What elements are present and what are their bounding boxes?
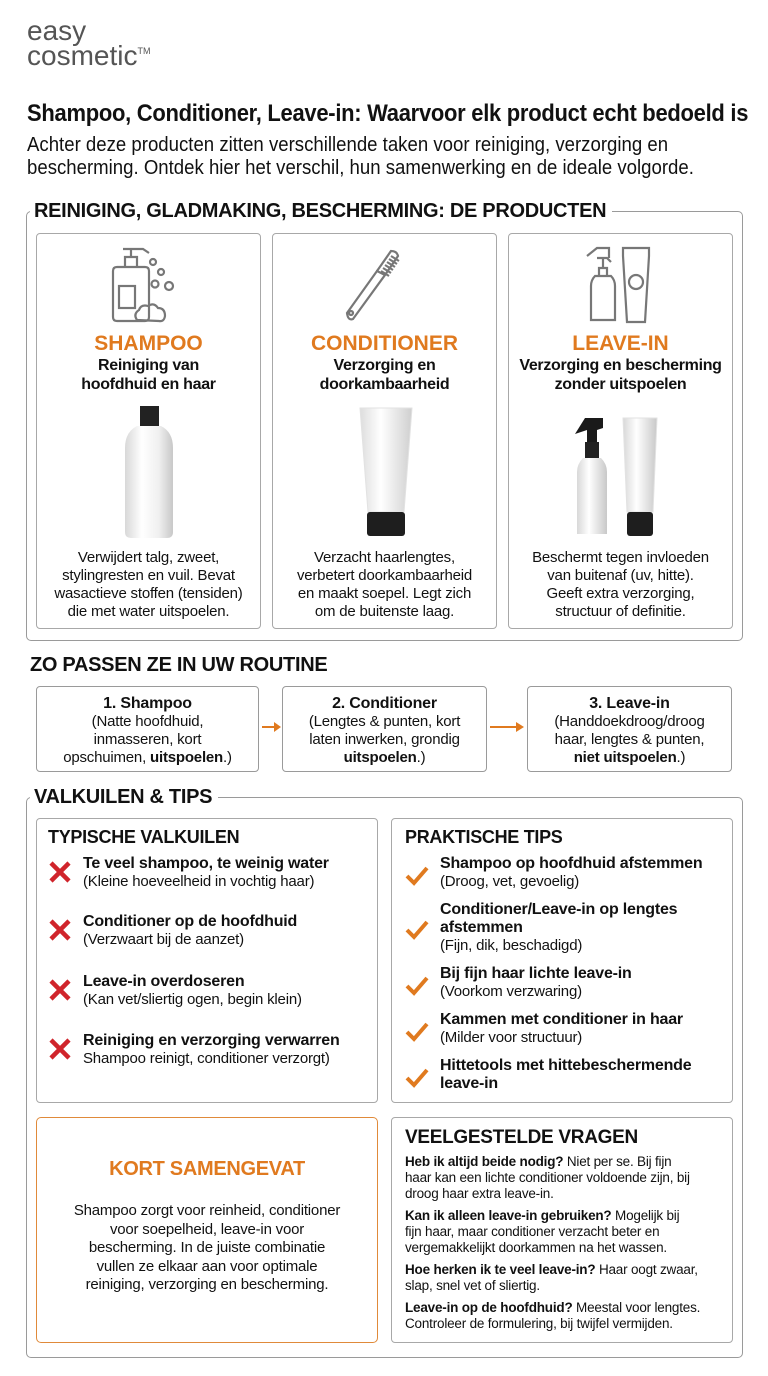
- heading: TYPISCHE VALKUILEN: [48, 827, 239, 847]
- arrow 1: [262, 722, 281, 732]
- description: om de buitenste laag.: [315, 603, 454, 620]
- pitfall 4: [50, 1032, 340, 1067]
- product name: CONDITIONER: [311, 332, 458, 355]
- step 3: [527, 686, 732, 772]
- summary heading: KORT SAMENGEVAT: [109, 1158, 305, 1180]
- FAQ items: Heb ik altijd beide nodig? Niet per se. Bij fijn: [405, 1154, 671, 1169]
- summary text: Shampoo zorgt voor reinheid, conditioner: [74, 1202, 340, 1219]
- tip 5: [406, 1057, 692, 1092]
- description: wasactieve stoffen (tensiden): [54, 585, 243, 602]
- summary text: reiniging, verzorging en bescherming.: [86, 1276, 328, 1293]
- tip 4: [406, 1011, 683, 1046]
- FAQ items: Kan ik alleen leave-in gebruiken? Mogelijk bij: [405, 1208, 679, 1223]
- section heading: routine: ZO PASSEN ZE IN UW ROUTINE: [30, 654, 327, 676]
- description: [297, 549, 472, 620]
- pitfall 1: Te veel shampoo, te weinig water: [83, 855, 329, 872]
- subtitle: hoofdhuid en haar: [81, 376, 216, 393]
- pitfall 2: [50, 913, 297, 948]
- logo: easy: [27, 15, 86, 46]
- image: tube: [360, 408, 412, 536]
- panel: products: [26, 211, 743, 641]
- FAQ items: Controleer de formulering, bij twijfel vermijden.: [405, 1316, 673, 1331]
- subtitle: Verzorging en bescherming: [519, 357, 722, 374]
- description: Geeft extra verzorging,: [546, 585, 694, 602]
- FAQ items: fijn haar, maar conditioner verzacht beter en: [405, 1224, 659, 1239]
- tip 2: Conditioner/Leave-in op lengtes: [440, 901, 677, 918]
- step 2: (Lengtes & punten, kort: [309, 713, 460, 730]
- tip 5: Hittetools met hittebeschermende: [440, 1057, 691, 1074]
- FAQ items: vergemakkelijkt doorkammen na het wassen.: [405, 1240, 667, 1255]
- subtitle: Achter deze producten zitten verschillende taken voor reiniging, verzorging en: [27, 134, 668, 156]
- summary text: vullen ze elkaar aan voor optimale: [97, 1258, 317, 1274]
- description: Verwijdert talg, zweet,: [78, 549, 219, 566]
- description: verbetert doorkambaarheid: [297, 567, 472, 584]
- description: [532, 549, 709, 620]
- logo: [27, 15, 150, 71]
- step 1: 1. Shampoo: [103, 695, 192, 712]
- tip 2: [406, 901, 677, 954]
- tip 1: Shampoo op hoofdhuid afstemmen: [440, 855, 702, 872]
- step 1: (Natte hoofdhuid,: [92, 713, 203, 730]
- pitfall 1: [50, 855, 329, 890]
- card: conditioner: [272, 233, 497, 629]
- step 3: 3. Leave-in: [589, 695, 670, 712]
- summary text: bescherming. In de juiste combinatie: [89, 1239, 325, 1256]
- tip 3: [406, 965, 632, 1000]
- pitfall 2: Conditioner op de hoofdhuid: [83, 913, 297, 930]
- icon: comb: [346, 250, 400, 320]
- description: die met water uitspoelen.: [68, 603, 229, 620]
- pitfall 3: (Kan vet/sliertig ogen, begin klein): [83, 991, 302, 1008]
- tip 5: leave-in: [440, 1075, 498, 1092]
- subtitle: bescherming. Ontdek hier het verschil, hun samenwerking en de ideale volgorde.: [27, 157, 694, 179]
- pitfall 3: Leave-in overdoseren: [83, 973, 244, 990]
- subtitle: [519, 357, 722, 393]
- product name: LEAVE-IN: [572, 332, 669, 355]
- step 2: uitspoelen.): [344, 749, 425, 766]
- description: structuur of definitie.: [555, 603, 686, 620]
- FAQ items: [405, 1154, 700, 1331]
- subtitle: [27, 134, 694, 179]
- panel: FAQ: [391, 1117, 733, 1343]
- section heading: products: REINIGING, GLADMAKING, BESCHERMING: DE PRODUCTEN: [34, 200, 606, 222]
- FAQ items: droog haar extra leave-in.: [405, 1186, 554, 1201]
- tip 4: (Milder voor structuur): [440, 1029, 582, 1046]
- step 1: inmasseren, kort: [94, 731, 201, 748]
- heading: PRAKTISCHE TIPS: [405, 827, 563, 847]
- tip 3: Bij fijn haar lichte leave-in: [440, 965, 632, 982]
- description: Verzacht haarlengtes,: [314, 549, 455, 566]
- section heading: pitfalls: VALKUILEN & TIPS: [34, 786, 212, 808]
- description: Beschermt tegen invloeden: [532, 549, 709, 566]
- pitfall 3: [50, 973, 302, 1008]
- FAQ items: Hoe herken ik te veel leave-in? Haar oogt zwaar,: [405, 1262, 698, 1277]
- card: shampoo: [36, 233, 261, 629]
- step 2: 2. Conditioner: [332, 695, 437, 712]
- subtitle: Reiniging van: [98, 357, 199, 374]
- step 3: (Handdoekdroog/droog: [554, 713, 705, 730]
- step 1: opschuimen, uitspoelen.): [63, 749, 232, 766]
- description: van buitenaf (uv, hitte).: [547, 567, 694, 584]
- step 3: haar, lengtes & punten,: [555, 731, 704, 748]
- subtitle: doorkambaarheid: [320, 376, 449, 393]
- description: en maakt soepel. Legt zich: [298, 585, 471, 602]
- subtitle: Verzorging en: [334, 357, 435, 374]
- description: [54, 549, 243, 620]
- subtitle: zonder uitspoelen: [555, 376, 686, 393]
- summary text: [74, 1202, 340, 1293]
- card: leave-in: [508, 233, 733, 629]
- tip 1: [406, 855, 702, 890]
- tip 1: (Droog, vet, gevoelig): [440, 873, 579, 890]
- image: shampoo bottle: [125, 406, 173, 538]
- step 2: laten inwerken, grondig: [309, 731, 460, 748]
- summary text: voor soepelheid, leave-in voor: [110, 1220, 304, 1238]
- panel: pitfalls & tips: [26, 797, 743, 1358]
- arrow 2: [490, 722, 524, 732]
- FAQ items: haar kan een lichte conditioner voldoende zijn, bij: [405, 1170, 690, 1185]
- FAQ items: slap, snel vet of sliertig.: [405, 1278, 540, 1293]
- icon: spray and tube: [586, 246, 650, 324]
- icon: pump bottle with foam: [112, 248, 174, 322]
- tip 4: Kammen met conditioner in haar: [440, 1011, 683, 1028]
- panel: summary: [36, 1117, 378, 1343]
- step 2: [282, 686, 487, 772]
- title: Shampoo, Conditioner, Leave-in: Waarvoor elk product echt bedoeld is: [27, 100, 748, 127]
- logo: cosmeticTM: [27, 40, 150, 71]
- FAQ items: Leave-in op de hoofdhuid? Meestal voor lengtes.: [405, 1300, 700, 1315]
- step 1: [36, 686, 259, 772]
- tip 3: (Voorkom verzwaring): [440, 983, 582, 1000]
- panel: practical tips: [391, 818, 733, 1103]
- pitfall 4: Reiniging en verzorging verwarren: [83, 1032, 340, 1049]
- subtitle: [81, 357, 216, 393]
- description: stylingresten en vuil. Bevat: [62, 567, 235, 584]
- product name: SHAMPOO: [94, 332, 203, 355]
- pitfall 4: Shampoo reinigt, conditioner verzorgt): [83, 1050, 330, 1067]
- step 3: niet uitspoelen.): [574, 749, 685, 766]
- pitfall 1: (Kleine hoeveelheid in vochtig haar): [83, 873, 314, 890]
- pitfall 2: (Verzwaart bij de aanzet): [83, 931, 244, 948]
- panel: typical pitfalls: [36, 818, 378, 1103]
- FAQ heading: VEELGESTELDE VRAGEN: [405, 1127, 638, 1148]
- subtitle: [320, 357, 449, 393]
- tip 2: afstemmen: [440, 919, 523, 936]
- image: spray bottle and tube: [575, 418, 658, 536]
- tip 2: (Fijn, dik, beschadigd): [440, 937, 582, 954]
